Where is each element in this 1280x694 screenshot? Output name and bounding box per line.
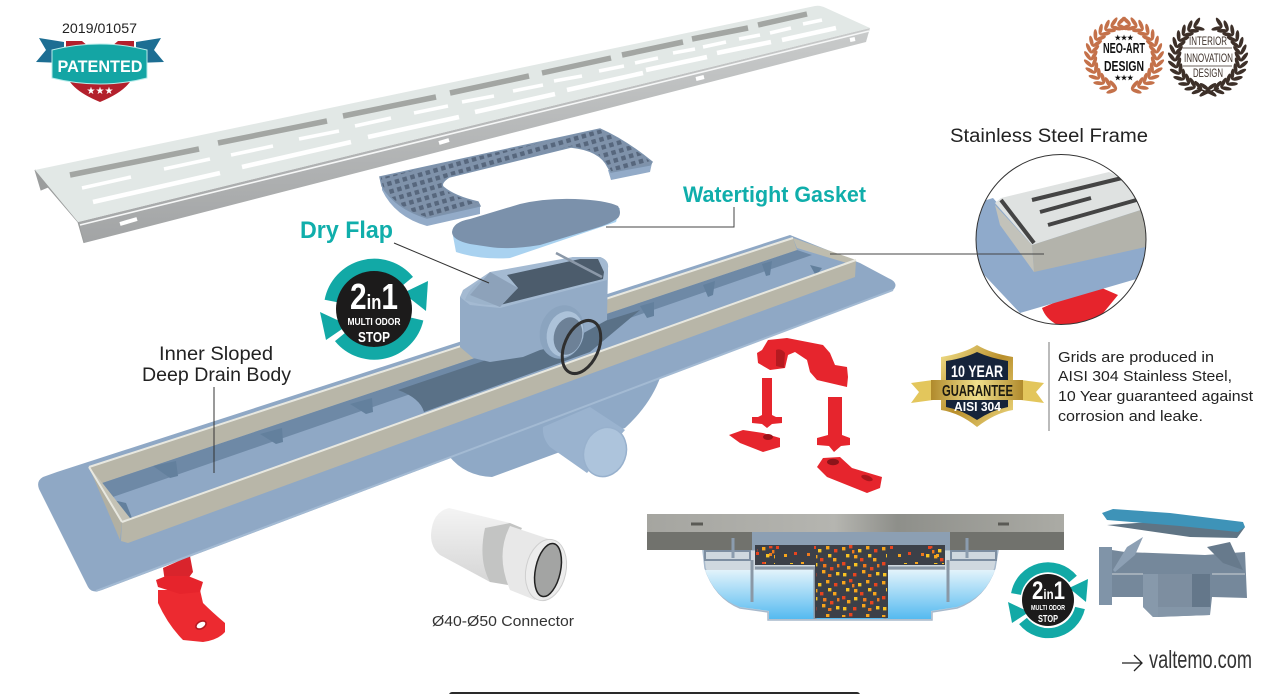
label: connector: Ø40-Ø50 Connector [432,613,574,630]
watertight gasket [452,199,620,258]
gold ribbon [911,380,1044,403]
foot two slot [860,474,874,482]
plate lattice [380,129,652,218]
grate end return [35,170,84,243]
filter cluster left [757,546,775,564]
black disc [336,271,412,347]
grate holes [120,39,855,224]
foot one [729,430,780,452]
label: dry flap: Dry Flap [300,217,393,244]
exploded trap [1099,509,1247,617]
award text: ★★★ [1115,74,1134,82]
frame right wall band [793,238,856,264]
gold shield [941,345,1013,427]
foot two hole [827,459,839,465]
leader: gasket [606,207,734,227]
shelves [1112,573,1245,575]
grate front face [78,28,870,243]
patent number: 2019/01057 [62,20,137,36]
aisi label: AISI 304 [954,399,1002,414]
bottom edge bar [449,692,860,694]
lower dark band [647,532,1064,550]
inset circle: frame corner detail [970,150,1150,330]
2in1 label: 2in1 [1032,577,1065,605]
connector mouth [520,536,572,604]
award text [1184,34,1233,80]
leader: inner body [213,387,215,473]
award text: NEO-ART [1103,40,1145,57]
outlet collar [534,300,590,364]
foot two [817,457,882,493]
grate slots [70,14,836,202]
2in1 label: 2in1 [350,276,398,317]
2in1 badge small [1008,567,1088,633]
arrow icon [1122,655,1142,671]
well right panel [1192,574,1210,607]
dry flap trap box [460,253,608,379]
frame lip highlight [89,238,856,522]
award text: ★★★ [1115,34,1134,42]
award text [1103,34,1145,82]
fitting posts [733,538,967,558]
leader: dry flap [394,243,489,283]
guarantee divider [1048,342,1050,431]
band holes [691,522,1009,526]
right flap [1207,542,1243,570]
center cap [752,532,950,550]
red fixing bracket [729,338,882,493]
laurel wreath [1154,15,1262,108]
inset frame wall left [995,205,1034,272]
inset red foot [1042,288,1118,324]
plate edge [96,290,893,591]
connector socket [502,526,552,600]
red adjustable foot [156,556,225,642]
inner cylinder [465,275,500,305]
filter cluster right [926,546,944,564]
top bar [556,253,602,277]
award badge: interior innovation design [1154,15,1262,108]
outlet collar ring [542,307,588,361]
interior back shadow [102,250,812,498]
patented text: PATENTED [58,57,142,76]
foot cross [156,576,203,594]
screw one [752,378,782,428]
foot one hole [763,434,773,440]
guarantee text: corrosion and leake. [1058,408,1203,425]
frame left lip [89,467,130,522]
inset outline [976,154,1146,324]
filter beads stem [816,545,887,617]
award text: DESIGN [1104,58,1144,75]
screw two [817,397,850,452]
trap body [1112,550,1247,617]
trap lid [1102,509,1245,532]
left flap [1113,537,1143,572]
filter beads left [756,546,816,564]
inner walls [752,560,948,619]
inset background [970,150,1150,330]
multi odor label: MULTI ODOR [348,316,401,328]
lid underside [1107,520,1245,538]
leader: stainless frame [830,253,1044,255]
flap plate [470,272,518,307]
bend highlight [80,31,869,225]
guarantee label: GUARANTEE [942,383,1013,400]
side fittings [705,551,996,560]
black disc [1022,574,1074,626]
inset frame wall front [1032,207,1150,272]
outlet pipe [543,407,633,483]
trap body [460,257,608,362]
inset slots [1001,178,1140,243]
award text: INNOVATION [1184,51,1233,65]
sump bowl [449,370,660,477]
label: inner sloped body [142,344,292,386]
foot hole [194,619,208,631]
interior floor [102,250,845,520]
arrow ring [320,265,428,353]
Drain body assembly [38,235,896,642]
guarantee text: Grids are produced in [1058,349,1214,366]
grid support plate [380,129,652,226]
award text: DESIGN [1193,66,1223,80]
stop label: STOP [358,329,390,346]
website link [1122,646,1252,674]
label: inner sloped body: Inner Sloped [159,344,273,365]
o-ring [555,315,608,379]
award dividers [1183,48,1232,66]
pvc connector [431,508,572,604]
bowl [703,550,998,620]
deep channel shadow [398,310,640,412]
retaining tabs [113,261,822,520]
stainless grate [35,6,870,243]
award text: INTERIOR [1189,34,1227,48]
teal banner [52,44,147,84]
guarantee badge [911,345,1044,427]
frame left wall [89,467,122,540]
navy shield [946,352,1008,420]
foot stem [163,556,193,582]
foot body [158,590,225,642]
left end plate [1099,547,1112,605]
2in1 badge large [320,265,428,353]
trap opening [500,259,604,305]
trap rim [460,257,608,308]
bracket arch shadow [776,349,785,368]
gold band [931,380,1023,400]
inset plate [970,198,1150,313]
ten year label: 10 YEAR [951,362,1003,381]
guarantee text: AISI 304 Stainless Steel, [1058,368,1232,385]
crossed stems [1197,88,1219,96]
ribbon ends [36,38,164,63]
patent badge [36,20,164,102]
label: stainless steel frame: Stainless Steel Frame [950,126,1148,147]
well panel [1143,574,1158,617]
dark chamber [755,545,945,618]
multi odor label: MULTI ODOR [1031,605,1065,612]
gasket blue base [453,208,620,258]
flange plate [38,235,896,591]
inset frame top [995,172,1150,245]
award badge: neo-art design [1077,14,1171,101]
plate lip [382,163,652,226]
outlet opening [550,314,586,358]
connector small barrel [431,508,510,582]
grate top face [35,6,870,222]
red shield [66,41,134,102]
cross-section [647,514,1064,620]
label: watertight gasket: Watertight Gasket [683,182,867,207]
stars: ★★★ [87,86,113,97]
label: inner sloped body: Deep Drain Body [142,365,292,386]
connector collar [482,523,522,585]
laurel wreath [1077,14,1171,101]
well floor [1158,607,1210,617]
stop label: STOP [1038,614,1058,625]
top band [647,514,1064,532]
filter beads right [887,546,944,564]
bracket bridge [757,338,848,387]
guarantee text: 10 Year guaranteed against [1058,388,1254,405]
guarantee text [1058,349,1254,425]
pipe end [577,421,633,483]
inset contents [976,172,1146,324]
frame front wall [121,260,856,543]
steel frame back wall [89,238,797,483]
connector opening [530,541,566,599]
well back [1158,574,1192,607]
pipe barrel [543,407,625,473]
gasket top [452,199,620,248]
water [705,570,995,619]
arrow ring [1008,567,1088,633]
